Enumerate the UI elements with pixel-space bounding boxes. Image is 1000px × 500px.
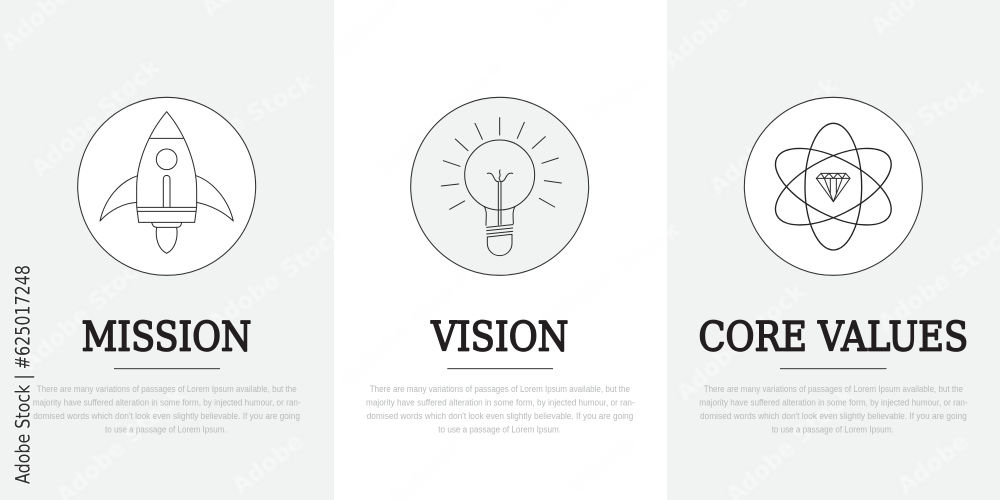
text block: mission [33, 384, 301, 434]
icon: rocket in circle [78, 97, 256, 275]
heading: mission: MISSION [82, 314, 252, 360]
watermark pattern: Adobe Stock [672, 278, 810, 406]
watermark pattern: Adobe Stock [835, 73, 989, 177]
heading: core values: CORE VALUES [698, 314, 968, 360]
watermark pattern: Adobe Stock [372, 54, 510, 182]
background: centre panel [334, 0, 667, 500]
text block: vision: majority have suffered alteration in some form, by injected humour, or ran- [366, 398, 635, 408]
icon: atom with diamond in circle [744, 97, 922, 275]
text block: mission: to use a passage of Lorem Ipsum. [105, 424, 227, 434]
divider: mission [114, 368, 220, 369]
background: left panel [0, 0, 334, 500]
background: right panel [667, 0, 1000, 500]
text block: core values: domised words which don't look even slightly believable. If you are going [700, 411, 967, 421]
watermark pattern: Adobe [563, 429, 643, 500]
watermark pattern: Adobe Stock [203, 220, 351, 337]
text block: core values: There are many variations of passages of Lorem Ipsum available, but the [704, 384, 963, 394]
watermark pattern: Adobe Stock [705, 72, 843, 200]
watermark pattern: Adobe [228, 429, 308, 500]
text block: vision [366, 384, 635, 434]
watermark pattern: Adobe Stock [337, 264, 475, 392]
watermark pattern: Adobe Stock [500, 69, 654, 173]
text block: core values: to use a passage of Lorem Ipsum. [772, 424, 894, 434]
text block: vision: There are many variations of passages of Lorem Ipsum available, but the [370, 384, 630, 394]
text block: mission: majority have suffered alteration in some form, by injected humour, or ran- [33, 398, 301, 408]
panel: mission [0, 0, 334, 500]
panel: core values [667, 0, 1000, 500]
panel: vision [334, 0, 667, 500]
watermark pattern: Adobe Stock [538, 216, 686, 333]
text block: vision: domised words which don't look even slightly believable. If you are going [367, 411, 633, 421]
text block: core values [699, 384, 968, 434]
heading: vision: VISION [430, 314, 568, 360]
divider: vision [447, 368, 553, 369]
watermark pattern: Adobe [893, 429, 973, 500]
watermark pattern: Adobe Stock [17, 248, 155, 376]
text block: vision: to use a passage of Lorem Ipsum. [438, 424, 561, 434]
text block: mission: There are many variations of passages of Lorem Ipsum available, but the [37, 384, 297, 394]
stock id stamp: Adobe Stock | #625017248 [12, 265, 34, 484]
divider: core values [780, 368, 886, 369]
watermark pattern: Adobe Stock [27, 54, 165, 182]
watermark pattern: Adobe Stock [165, 69, 319, 173]
text block: core values: majority have suffered alteration in some form, by injected humour, or ran- [699, 398, 968, 408]
text block: mission: domised words which don't look even slightly believable. If you are going [33, 411, 300, 421]
icon: light bulb in circle [411, 97, 589, 275]
